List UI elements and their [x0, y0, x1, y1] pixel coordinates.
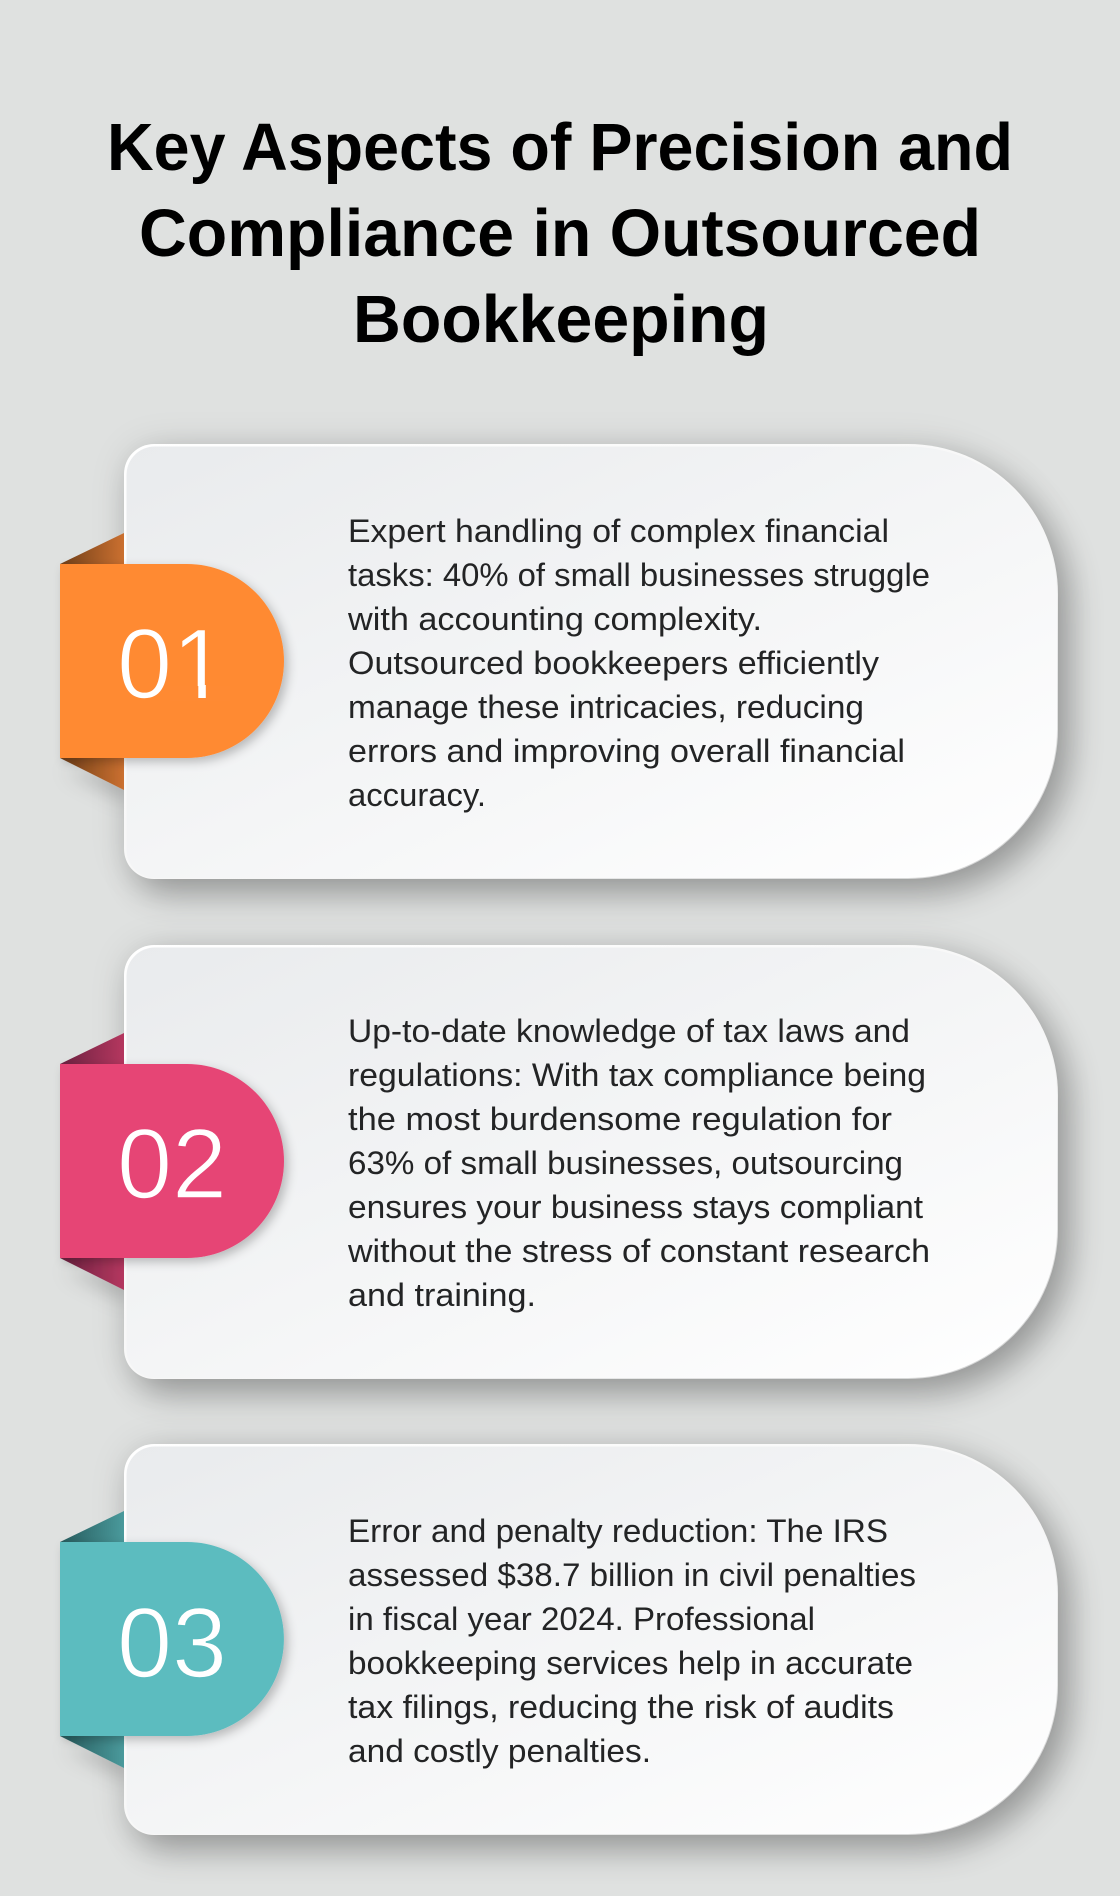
ribbon fold bottom 01	[60, 758, 124, 790]
text: step 03: assessed $38.7 billion in civil penalties	[348, 1557, 916, 1593]
panel: step 01	[60, 444, 1058, 879]
text: step 01: Outsourced bookkeepers efficiently	[348, 645, 880, 681]
text: step 01: Expert handling of complex financial	[348, 513, 889, 549]
ribbon fold top 01	[60, 533, 124, 564]
text: step 02	[347, 1013, 930, 1313]
number 03: 03	[117, 1587, 227, 1698]
text: step 02: Up-to-date knowledge of tax laws and	[348, 1013, 910, 1049]
text: step 02: without the stress of constant research	[347, 1233, 930, 1269]
card edge 01	[124, 444, 1058, 879]
title: Key Aspects of Precision and	[107, 110, 1013, 185]
badge 03	[60, 1542, 284, 1736]
panel: step 03	[60, 1444, 1058, 1835]
ribbon fold bottom 03	[60, 1736, 124, 1768]
text: step 03: tax filings, reducing the risk of audits	[348, 1689, 894, 1725]
text: step 03	[348, 1513, 916, 1769]
card face 01	[126, 446, 1057, 878]
number 02: 02	[117, 1108, 227, 1219]
card face 03	[126, 1446, 1057, 1834]
title: Bookkeeping	[353, 282, 769, 357]
badge 02	[60, 1064, 284, 1258]
badge 01	[60, 564, 284, 758]
text: step 01: errors and improving overall financial	[348, 733, 905, 769]
title	[107, 110, 1013, 357]
card shadow 01	[124, 444, 1058, 879]
text: step 01: manage these intricacies, reducing	[348, 689, 864, 725]
card edge 02	[124, 945, 1058, 1379]
text: step 02: 63% of small businesses, outsourcing	[348, 1145, 903, 1181]
card shadow 03	[124, 1444, 1058, 1835]
text: step 01: with accounting complexity.	[347, 601, 762, 637]
ribbon fold top 02	[60, 1033, 124, 1064]
text: step 02: and training.	[348, 1277, 536, 1313]
ribbon fold bottom 02	[60, 1258, 124, 1290]
text: step 01	[347, 513, 930, 813]
text: step 03: in fiscal year 2024. Professional	[348, 1601, 815, 1637]
ribbon fold top 03	[60, 1511, 124, 1542]
card face 02	[126, 948, 1057, 1378]
number 01: 01	[117, 608, 227, 719]
text: step 01: accuracy.	[348, 777, 486, 813]
text: step 02: ensures your business stays compliant	[348, 1189, 923, 1225]
text: step 02: regulations: With tax compliance being	[348, 1057, 926, 1093]
card shadow 02	[124, 945, 1058, 1379]
card edge 03	[124, 1444, 1058, 1835]
text: step 02: the most burdensome regulation for	[348, 1101, 892, 1137]
text: step 03: and costly penalties.	[348, 1733, 651, 1769]
title: Compliance in Outsourced	[139, 196, 981, 271]
panel: step 02	[60, 945, 1058, 1379]
text: step 03: Error and penalty reduction: The IRS	[348, 1513, 888, 1549]
text: step 01: tasks: 40% of small businesses struggle	[348, 557, 930, 593]
text: step 03: bookkeeping services help in accurate	[348, 1645, 913, 1681]
